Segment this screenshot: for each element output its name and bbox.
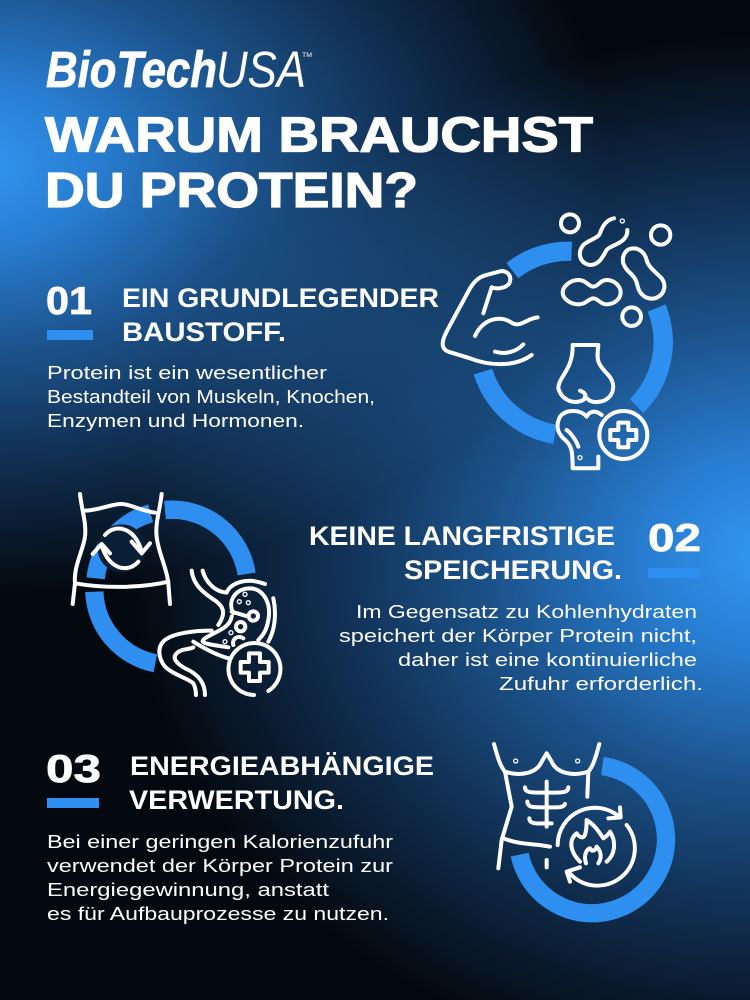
title: DU PROTEIN? [45, 163, 418, 218]
body 01: Enzymen und Hormonen. [47, 410, 304, 431]
cut-out behind arrows [98, 524, 146, 572]
circular arrows [93, 529, 150, 568]
heading 01 [122, 283, 439, 347]
ring segments [483, 251, 663, 434]
muscle arm [443, 271, 538, 364]
logo: BioTechUSA: TM [302, 53, 312, 59]
title [45, 108, 593, 218]
ring segments [94, 510, 247, 663]
heading 01: BAUSTOFF. [122, 317, 286, 347]
body 01 [47, 362, 375, 431]
heading 03: ENERGIEABHÄNGIGE [130, 751, 434, 781]
number 02: 02 [648, 517, 701, 560]
section 03 text [46, 748, 434, 924]
flame [571, 820, 614, 863]
body 02: daher ist eine kontinuierliche [398, 649, 697, 670]
body 02: Im Gegensatz zu Kohlenhydraten [356, 601, 697, 622]
number 01: 01 [46, 280, 92, 323]
body 02: Zufuhr erforderlich. [499, 673, 703, 694]
heading 03 [129, 751, 434, 815]
stomach and intestine [159, 571, 280, 695]
logo: BioTechUSA: USA [216, 41, 306, 98]
body 03: Energiegewinnung, anstatt [47, 879, 329, 900]
body 02 [339, 601, 703, 694]
ring segment [520, 766, 666, 913]
heading 03: VERWERTUNG. [129, 785, 344, 815]
bone joint with plus [558, 345, 647, 468]
body 03: es für Aufbauprozesse zu nutzen. [47, 903, 389, 924]
circular arrows [558, 807, 635, 886]
body 01: Bestandteil von Muskeln, Knochen, [47, 386, 375, 407]
heading 02: SPEICHERUNG. [404, 555, 622, 585]
heading 02 [309, 521, 622, 585]
section 02 text [309, 517, 703, 694]
heading 02: KEINE LANGFRISTIGE [309, 521, 615, 551]
accent bar 03 [47, 798, 99, 808]
section 01 text [46, 280, 439, 431]
logo: BioTechUSA: BioTech [46, 41, 217, 98]
number 03: 03 [46, 748, 101, 791]
icon: torso and flame in ring [494, 744, 666, 913]
icon: muscle, molecules and bone in ring [443, 214, 670, 468]
waist outline [73, 494, 170, 604]
title: WARUM BRAUCHST [45, 108, 593, 162]
body 03: Bei einer geringen Kalorienzufuhr [47, 831, 393, 852]
molecules [561, 214, 670, 326]
torso outline [494, 744, 599, 868]
accent bar 02 [648, 568, 700, 578]
body 03: verwendet der Körper Protein zur [47, 855, 393, 876]
body 01: Protein ist ein wesentlicher [47, 362, 327, 383]
icon: waist and stomach in ring [73, 494, 280, 695]
body 02: speichert der Körper Protein nicht, [339, 625, 697, 646]
heading 01: EIN GRUNDLEGENDER [122, 283, 439, 313]
body 03 [47, 831, 393, 924]
accent bar 01 [47, 330, 93, 340]
